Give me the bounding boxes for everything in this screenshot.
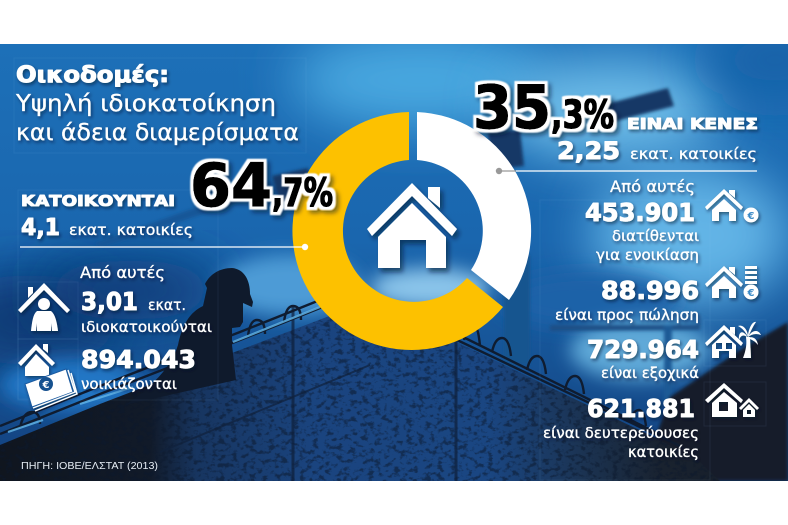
label: ΚΑΤΟΙΚΟΥΝΤΑΙ: [21, 192, 175, 210]
rented: [81, 345, 196, 393]
rented: νοικιάζονται: [81, 375, 177, 393]
holiday homes: 729.964: [587, 335, 699, 364]
for sale: 88.996: [601, 276, 699, 305]
icon: house with euro coin: €: [747, 211, 755, 222]
rented: 894.043: [81, 345, 196, 374]
for sale: είναι προς πώληση: [555, 306, 699, 324]
value 4,1 million homes: [21, 215, 193, 241]
icon: house with coin stack: €: [747, 288, 755, 299]
segment: vacant 35.3%: [417, 112, 531, 300]
icon: person under roof: [18, 283, 70, 331]
owner occupied: 3,01: [81, 287, 138, 316]
secondary homes: [543, 394, 699, 461]
owner occupied: [81, 287, 212, 336]
title: [15, 63, 299, 146]
big number 35,3%: 35: [473, 73, 551, 143]
title: και άδεια διαμερίσματα: [16, 120, 299, 146]
icon: large and small house: [705, 383, 759, 417]
for rent: [585, 198, 699, 264]
callout: 35,3% vacant: [473, 73, 758, 174]
heading: Από αυτές: [610, 177, 695, 196]
source: ΠΗΓΗ: ΙΟΒΕ/ΕΛΣΤΑΤ (2013): [21, 461, 158, 472]
big number 64,7%: 64: [190, 151, 272, 221]
crane arms: [95, 88, 700, 405]
icon: house with coin stack: [705, 266, 758, 300]
wall: [0, 300, 720, 481]
worker silhouette: [152, 268, 253, 396]
heading: Από αυτές: [80, 263, 165, 282]
owner occupied: ιδιοκατοικούνται: [81, 318, 212, 336]
value 2,25 million homes: εκατ. κατοικίες: [630, 145, 757, 163]
icon: house with banknotes: €: [42, 380, 50, 391]
value 2,25 million homes: [557, 137, 757, 165]
right dark mass: [640, 322, 788, 481]
value 4,1 million homes: εκατ. κατοικίες: [69, 221, 193, 239]
title: Οικοδομές:: [16, 63, 169, 88]
title: Υψηλή ιδιοκατοίκηση: [15, 91, 276, 117]
block: inhabited breakdown: [18, 263, 212, 411]
faint layout guide rectangles: [14, 58, 766, 480]
railing: [0, 300, 659, 436]
value 4,1 million homes: 4,1: [21, 215, 60, 241]
for rent: διατίθενται: [612, 227, 699, 245]
leader line: [496, 168, 757, 174]
for rent: για ενοικίαση: [596, 246, 699, 264]
segment: inhabited 64.7%: [292, 112, 503, 350]
icon: house with euro coin: [705, 189, 758, 222]
owner occupied: εκατ.: [148, 296, 186, 314]
icon: central house: [367, 183, 457, 268]
big number 35,3%: ,3%: [551, 93, 614, 138]
value 2,25 million homes: 2,25: [557, 137, 620, 165]
secondary homes: κατοικίες: [628, 443, 699, 461]
holiday homes: είναι εξοχικά: [601, 364, 699, 382]
donut chart: [292, 112, 531, 350]
leader line: [20, 244, 308, 250]
holiday homes: [587, 335, 699, 382]
rail gaps: [8, 307, 320, 432]
secondary homes: είναι δευτερεύουσες: [543, 424, 699, 442]
secondary homes: 621.881: [587, 394, 695, 423]
icon: house with palm tree: [705, 322, 761, 358]
for rent: 453.901: [585, 198, 695, 227]
icon: house with banknotes: [18, 344, 77, 411]
callout: 64,7% inhabited: [20, 151, 333, 250]
for sale: [555, 276, 699, 324]
big number 64,7%: ,7%: [272, 171, 333, 216]
label: ΕΙΝΑΙ ΚΕΝΕΣ: [627, 115, 758, 133]
block: vacant breakdown: [543, 177, 761, 461]
